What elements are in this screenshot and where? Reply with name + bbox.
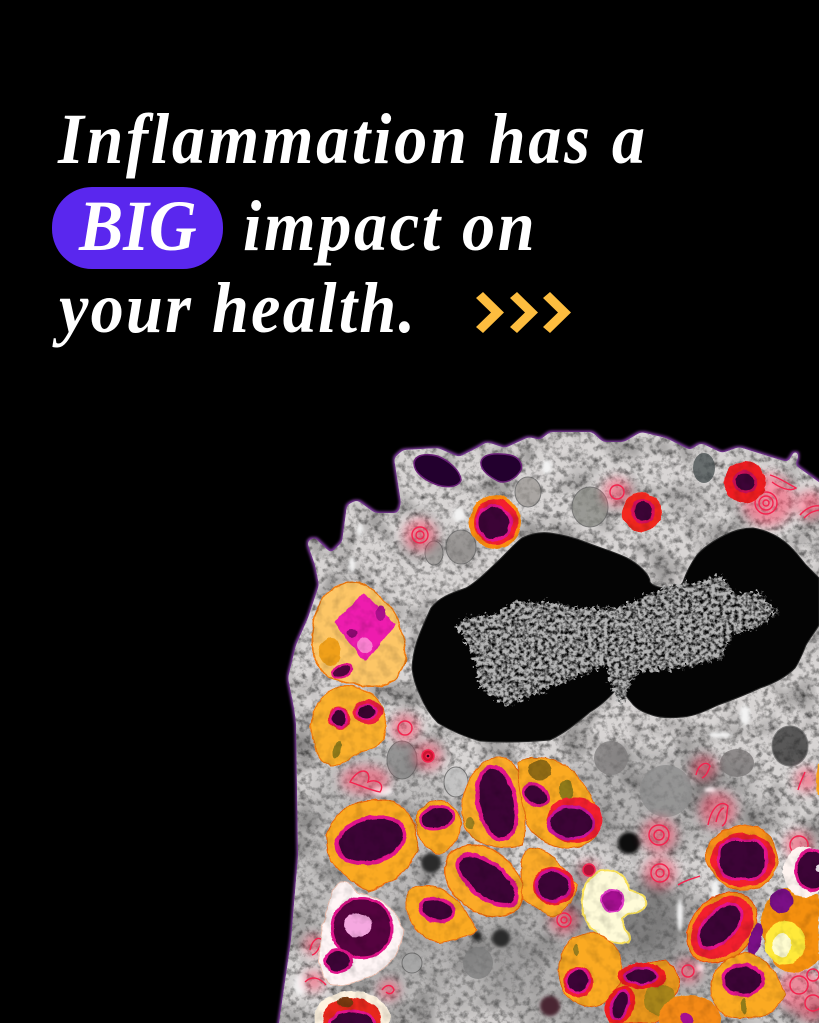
red membrane whorls: [305, 475, 819, 1011]
highlighted word pill: BIG: [78, 185, 197, 266]
darker cytoplasm shading: [290, 740, 760, 1023]
icon: triple chevron arrow: [476, 292, 571, 333]
granule M: [711, 952, 785, 1018]
dark vesicles: [421, 832, 640, 1016]
headline line 1: Inflammation has a: [57, 98, 645, 179]
cytoplasm: [278, 432, 819, 1023]
cell nucleus: [412, 528, 819, 742]
granule fragment right edge: [816, 763, 819, 797]
secretory granules: [311, 453, 819, 1023]
nucleus heterochromatin: [412, 528, 819, 742]
granule A: [326, 800, 417, 891]
granule L: [673, 879, 771, 977]
granule H: [558, 933, 622, 1007]
granule cluster I: [600, 960, 680, 1023]
white granule lower left: [320, 882, 403, 986]
red granule top 3: [716, 453, 774, 511]
white granule with yellow rim: [582, 870, 646, 943]
red granule top 2: [622, 492, 662, 532]
granule top right edge: [783, 847, 819, 897]
granule C: [462, 757, 525, 848]
headline: [52, 98, 645, 348]
nucleus euchromatin: [456, 575, 778, 705]
granule B: [415, 800, 462, 854]
cell membrane glow: [278, 432, 819, 1023]
granule: left with two dark cores: [311, 686, 386, 766]
red granule top 1: [469, 495, 521, 549]
granule F: [521, 848, 578, 917]
granule G: [406, 886, 477, 943]
granule: upper left with magenta core: [312, 582, 406, 687]
red inflammation glow: [304, 474, 819, 1021]
granule bottom left edge: [314, 991, 390, 1023]
white vacuoles: [294, 460, 806, 995]
cell micrograph: [278, 432, 819, 1023]
granule K: [706, 825, 778, 890]
granule E: [431, 830, 537, 932]
headline line 3: your health.: [52, 267, 415, 348]
highlighted word pill: [52, 185, 223, 269]
granule D: [518, 757, 603, 848]
granule J: [659, 995, 721, 1023]
headline line 2: impact on: [243, 185, 535, 266]
dark purple vacuoles: [414, 454, 522, 487]
mitochondria: [387, 453, 808, 979]
yellow degranulating granule: [745, 888, 819, 972]
